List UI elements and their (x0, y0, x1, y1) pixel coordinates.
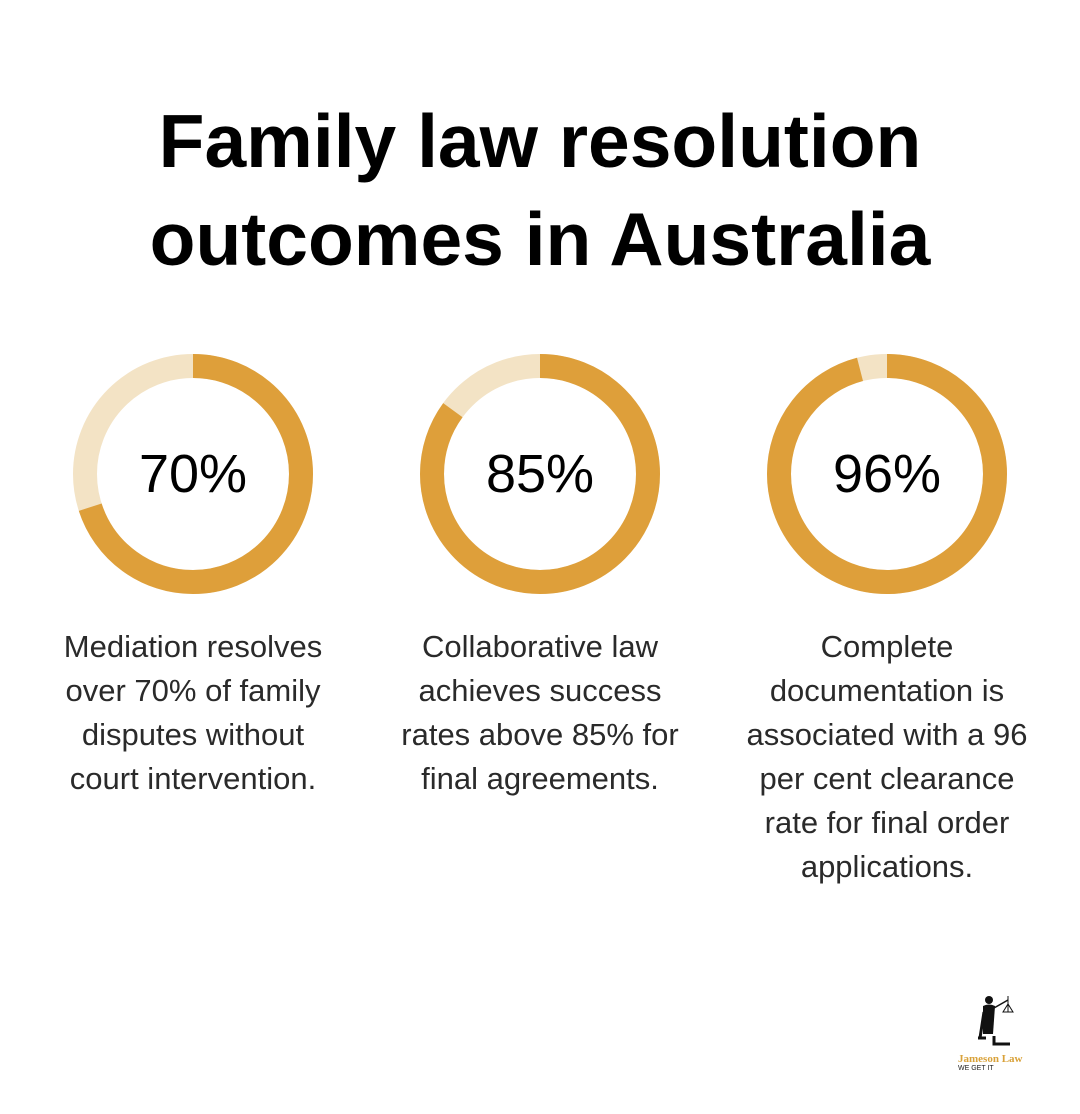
caption: collaborative law: Collaborative law (422, 629, 658, 664)
caption: documentation: rate for final order (765, 805, 1009, 840)
caption: documentation: applications. (801, 849, 973, 884)
logo (958, 996, 1022, 1072)
donut: 70%: 70% (139, 444, 247, 504)
caption: collaborative law: final agreements. (421, 761, 659, 796)
caption: documentation: documentation is (770, 673, 1004, 708)
logo: Jameson Law (958, 1053, 1022, 1065)
donut: 96%: 96% (833, 444, 941, 504)
caption: documentation: per cent clearance (759, 761, 1015, 796)
caption: collaborative law: achieves success (419, 673, 661, 708)
caption: collaborative law (401, 629, 679, 796)
donut: 85% (420, 354, 660, 594)
donut: 70% (73, 354, 313, 594)
caption: mediation: disputes without (82, 717, 304, 752)
donut: 96% (767, 354, 1007, 594)
title: outcomes in Australia (150, 197, 930, 281)
caption: documentation: Complete (821, 629, 953, 664)
text: WE GET IT (958, 1065, 994, 1072)
caption: mediation: Mediation resolves (64, 629, 322, 664)
title: Family law resolution (159, 99, 921, 183)
title (150, 99, 931, 281)
caption: collaborative law: rates above 85% for (401, 717, 679, 752)
caption: documentation (747, 629, 1027, 884)
caption: documentation: associated with a 96 (747, 717, 1027, 752)
donut: 85%: 85% (486, 444, 594, 504)
caption: mediation (64, 629, 322, 796)
caption: mediation: over 70% of family (66, 673, 320, 708)
caption: mediation: court intervention. (70, 761, 316, 796)
